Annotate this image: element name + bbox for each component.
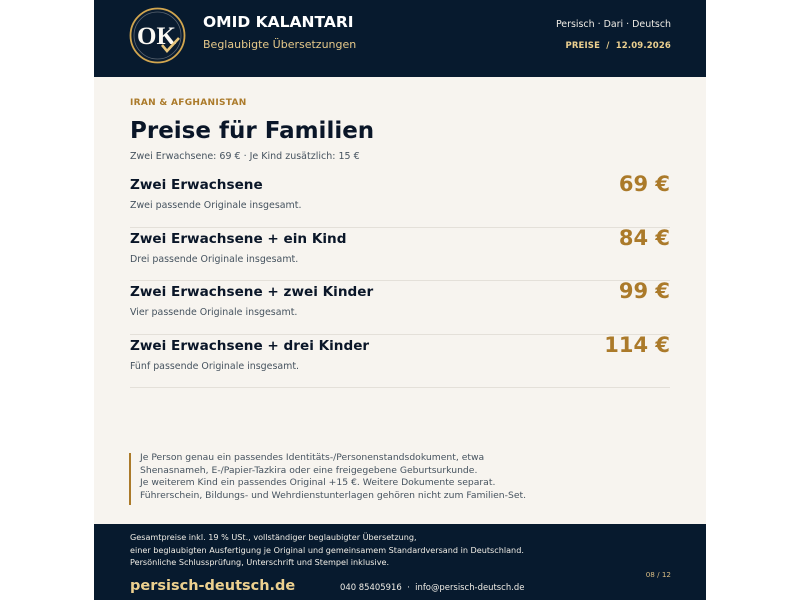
note text xyxy=(140,452,526,501)
footer legal text xyxy=(130,532,524,567)
icon: OK logo seal: OK xyxy=(137,23,176,50)
section and date: PREISE / 12.09.2026 xyxy=(565,40,671,50)
price row 4: Fünf passende Originale insgesamt. xyxy=(130,361,299,372)
price row 1: 69 € xyxy=(619,172,670,196)
brand tagline: Beglaubigte Übersetzungen xyxy=(203,38,356,51)
note text: Je weiterem Kind ein passendes Original +15 €. Weitere Dokumente separat. xyxy=(140,477,495,488)
note text: Führerschein, Bildungs- und Wehrdienstunterlagen gehören nicht zum Familien-Set. xyxy=(140,490,526,501)
price row 2: 84 € xyxy=(619,226,670,250)
subtitle: Zwei Erwachsene: 69 € · Je Kind zusätzlich: 15 € xyxy=(130,151,360,162)
price row 3: Vier passende Originale insgesamt. xyxy=(130,307,297,318)
languages: Persisch · Dari · Deutsch xyxy=(556,19,671,30)
page number: 08 / 12 xyxy=(646,570,671,579)
price row 4: 114 € xyxy=(604,333,670,357)
price row 4 xyxy=(130,333,670,372)
note text: Je Person genau ein passendes Identitäts-/Personenstandsdokument, etwa xyxy=(140,452,484,463)
price row 4: Zwei Erwachsene + drei Kinder xyxy=(130,338,369,354)
price row 3: Zwei Erwachsene + zwei Kinder xyxy=(130,284,373,300)
price row 1 xyxy=(130,172,670,211)
header band xyxy=(94,0,706,77)
note text: Shenasnameh, E-/Papier-Tazkira oder eine freigegebene Geburtsurkunde. xyxy=(140,465,477,476)
eyebrow: IRAN & AFGHANISTAN xyxy=(130,98,247,108)
footer legal text: Gesamtpreise inkl. 19 % USt., vollständiger beglaubigter Übersetzung, xyxy=(130,532,417,542)
price row 2: Drei passende Originale insgesamt. xyxy=(130,254,298,265)
footer legal text: Persönliche Schlussprüfung, Unterschrift und Stempel inklusive. xyxy=(130,557,389,567)
price row 1: Zwei Erwachsene xyxy=(130,177,263,193)
contact: 040 85405916 · info@persisch-deutsch.de xyxy=(340,582,524,592)
price row 2: Zwei Erwachsene + ein Kind xyxy=(130,231,346,247)
footer band xyxy=(94,524,706,600)
footer legal text: einer beglaubigten Ausfertigung je Original und gemeinsamem Standardversand in Deutschland. xyxy=(130,545,524,555)
website: persisch-deutsch.de xyxy=(130,578,295,594)
icon: OK logo seal xyxy=(130,8,186,64)
title: Preise für Familien xyxy=(130,118,374,144)
price row 2 xyxy=(130,226,670,265)
page xyxy=(94,0,706,600)
price row 3 xyxy=(130,279,670,318)
brand name: OMID KALANTARI xyxy=(203,13,354,31)
price row 1: Zwei passende Originale insgesamt. xyxy=(130,200,301,211)
note block xyxy=(129,453,629,505)
price row 3: 99 € xyxy=(619,279,670,303)
